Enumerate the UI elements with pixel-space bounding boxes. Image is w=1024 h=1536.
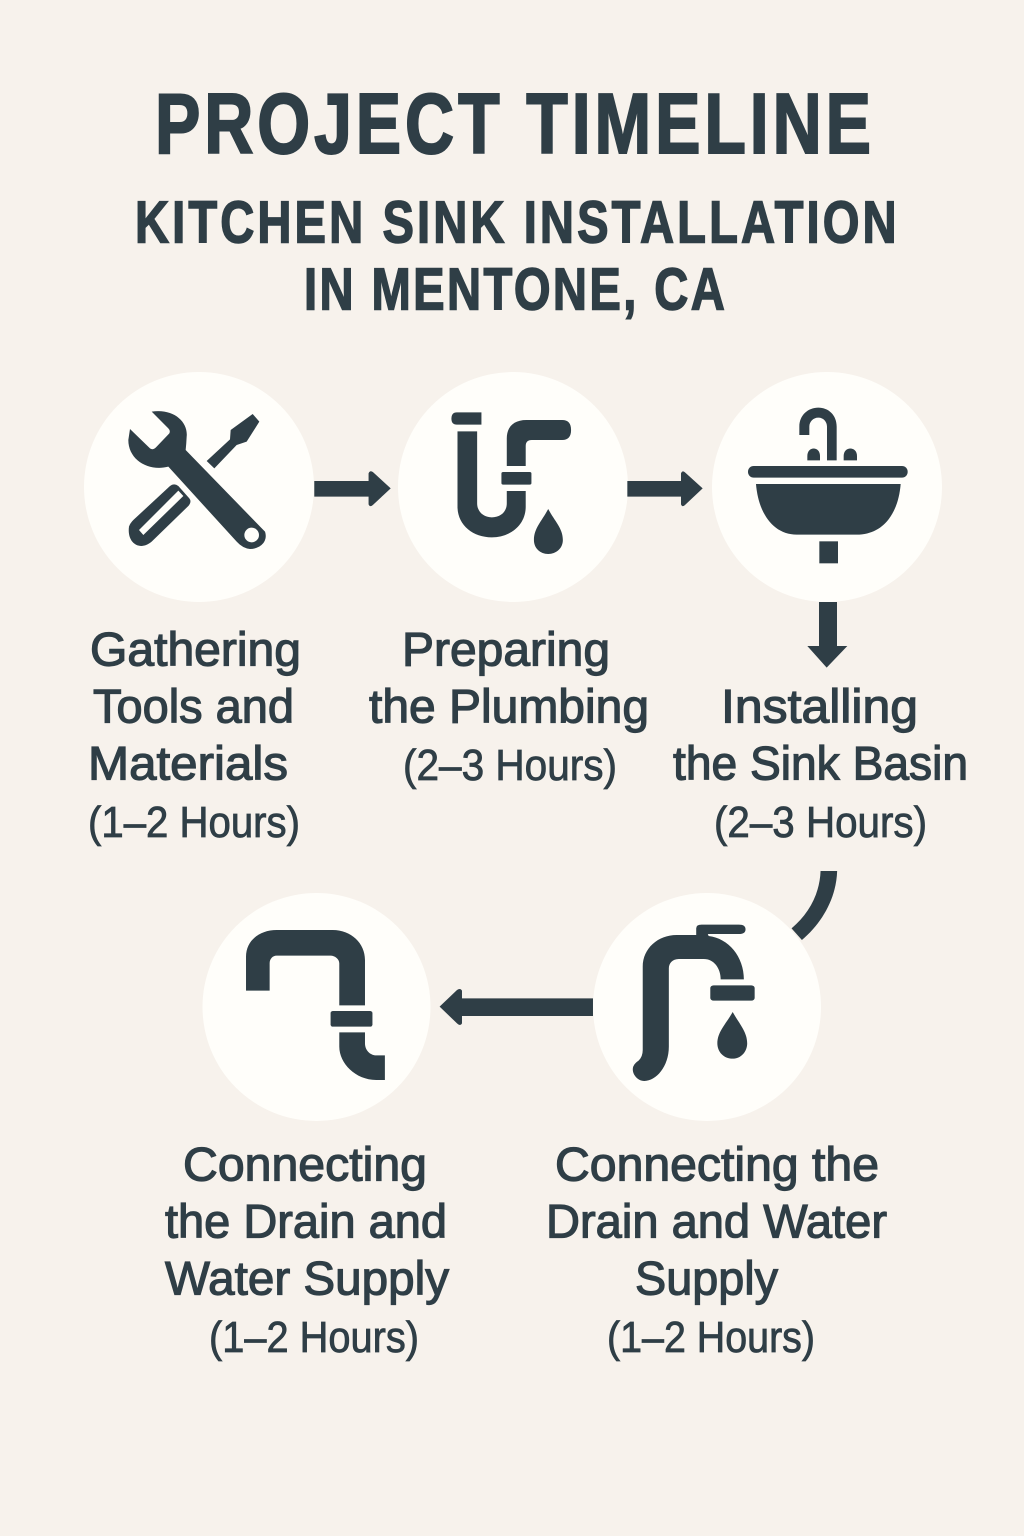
label: step 1: Tools and: [93, 680, 294, 732]
label: step 5: [165, 1138, 450, 1362]
icon: p-trap pipe with drop: [451, 412, 571, 554]
title: PROJECT TIMELINE: [155, 77, 871, 172]
step 3: installing the sink basin: [673, 372, 968, 847]
label: step 3: [673, 680, 968, 847]
step 1: gathering tools and materials: [84, 372, 314, 847]
icon: sink with faucet: [748, 408, 908, 563]
label: step 2: the Plumbing: [369, 680, 649, 732]
label: step 4: Connecting the: [555, 1138, 879, 1190]
label: step 2: Preparing: [402, 622, 610, 676]
label: step 5: (1–2 Hours): [209, 1313, 419, 1362]
label: step 5: Connecting: [183, 1138, 427, 1190]
label: step 3: the Sink Basin: [673, 736, 968, 790]
circle: step 5: [202, 893, 430, 1121]
subtitle: [135, 190, 897, 323]
label: step 5: Water Supply: [165, 1252, 450, 1304]
label: step 2: (2–3 Hours): [403, 741, 617, 790]
icon: wrench and screwdriver: [128, 411, 266, 549]
label: step 1: (1–2 Hours): [88, 798, 300, 847]
subtitle: KITCHEN SINK INSTALLATION: [135, 190, 897, 256]
circle: step 3: [712, 372, 942, 602]
circle: step 4: [593, 893, 821, 1121]
label: step 1: Materials: [88, 736, 288, 790]
icon: drain pipe: [246, 930, 385, 1080]
label: step 4: (1–2 Hours): [607, 1313, 815, 1362]
label: step 3: Installing: [721, 680, 918, 732]
step 4: connecting the drain and water supply (right): [546, 893, 887, 1362]
step 5: connecting the drain and water supply (left): [165, 893, 450, 1362]
arrow: curved connector from step 3 to step 4: [792, 871, 837, 940]
circle: step 1: [84, 372, 314, 602]
arrow: step 1 to step 2: [314, 471, 391, 506]
label: step 2: [369, 622, 649, 790]
label: step 3: (2–3 Hours): [714, 798, 927, 847]
step 2: preparing the plumbing: [369, 372, 649, 790]
arrow: step 2 to step 3: [627, 471, 703, 506]
circle: step 2: [398, 372, 628, 602]
label: step 4: [546, 1138, 887, 1362]
arrow: step 4 to step 5: [440, 989, 593, 1025]
label: step 4: Supply: [635, 1252, 778, 1304]
subtitle: IN MENTONE, CA: [304, 257, 725, 323]
arrow: step 3 down: [807, 602, 847, 668]
label: step 1: [88, 622, 301, 847]
label: step 5: the Drain and: [165, 1194, 447, 1248]
label: step 4: Drain and Water: [546, 1194, 887, 1248]
label: step 1: Gathering: [90, 622, 301, 676]
icon: faucet with drop: [633, 925, 755, 1081]
